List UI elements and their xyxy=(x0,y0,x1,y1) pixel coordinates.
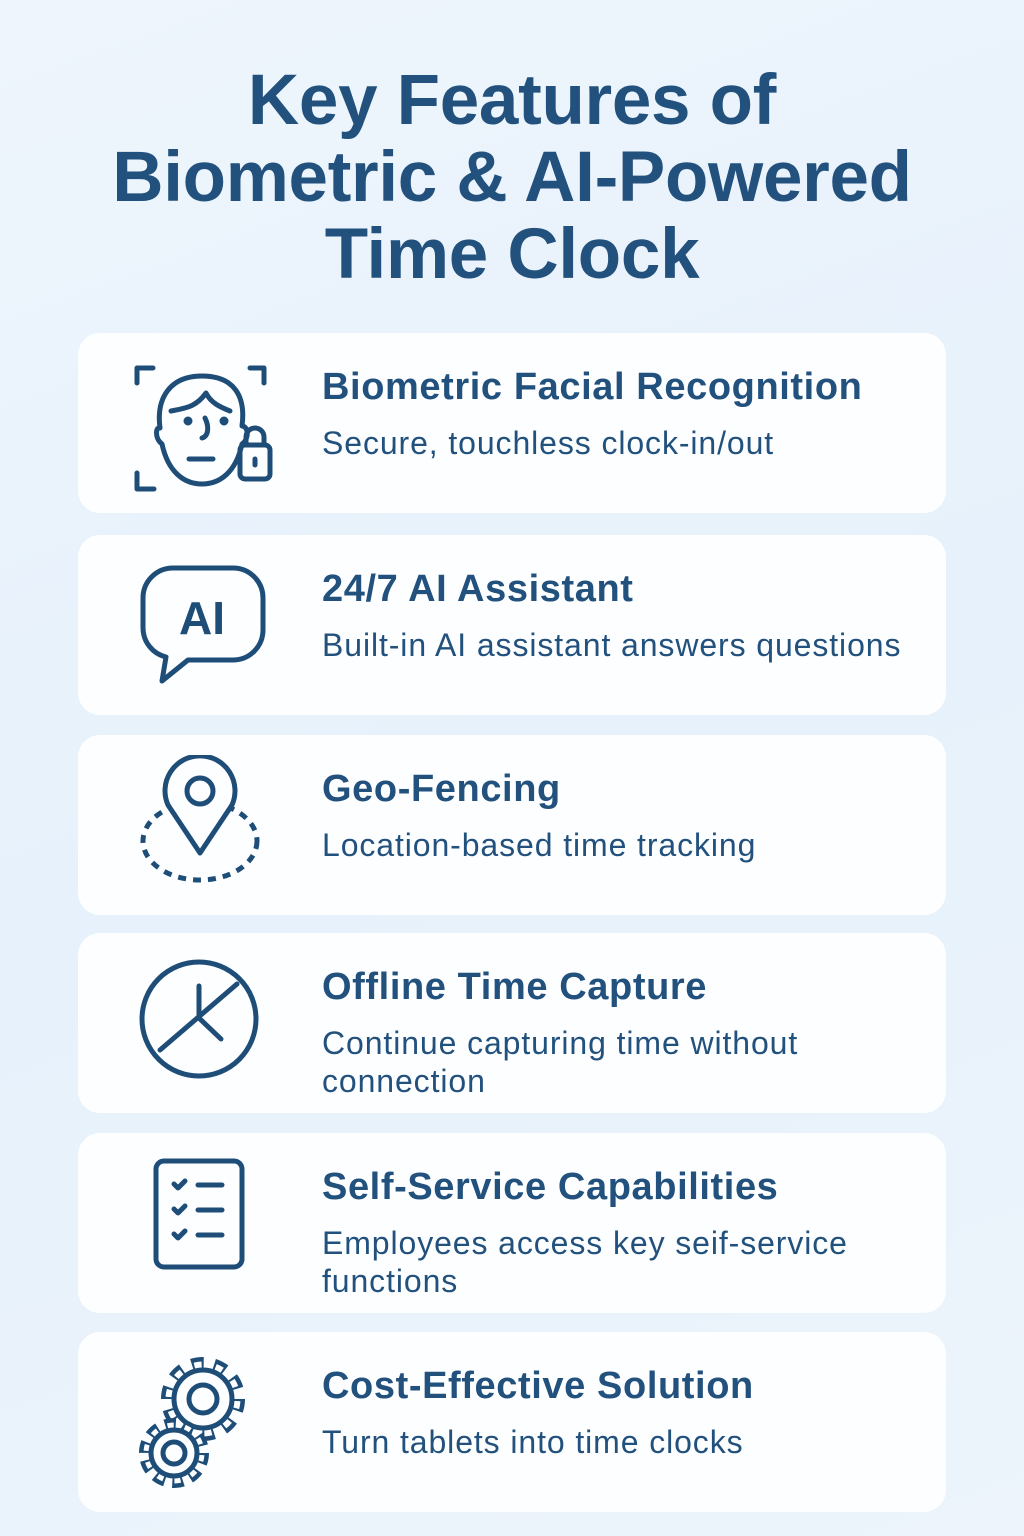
description: functions xyxy=(322,1263,458,1299)
description: connection xyxy=(322,1063,486,1099)
title: Time Clock xyxy=(325,215,699,294)
icon: gears xyxy=(139,1357,245,1488)
panel: geo-fencing xyxy=(78,735,946,915)
panel: cost-effective xyxy=(78,1332,946,1512)
panel: facial recognition xyxy=(78,333,946,513)
icon: AI speech bubble: AI xyxy=(179,592,225,644)
title xyxy=(112,61,912,294)
heading: Biometric Facial Recognition xyxy=(322,366,862,408)
panel: self-service xyxy=(78,1133,946,1313)
description: Turn tablets into time clocks xyxy=(322,1424,744,1460)
heading: Cost-Effective Solution xyxy=(322,1365,754,1407)
panel: AI assistant xyxy=(78,535,946,715)
title: Biometric & AI-Powered xyxy=(112,138,912,217)
description xyxy=(322,1225,848,1299)
description: Employees access key seif-service xyxy=(322,1225,848,1261)
icon: checklist xyxy=(154,1158,244,1270)
description: Location-based time tracking xyxy=(322,827,756,863)
heading: 24/7 AI Assistant xyxy=(322,568,634,610)
description: Built-in AI assistant answers questions xyxy=(322,627,901,663)
description: Secure, touchless clock-in/out xyxy=(322,425,774,461)
title: Key Features of xyxy=(248,61,776,140)
heading: Offline Time Capture xyxy=(322,966,707,1008)
heading: Geo-Fencing xyxy=(322,768,561,810)
icon: map pin with dashed ring xyxy=(140,755,260,882)
description: Continue capturing time without xyxy=(322,1025,798,1061)
description xyxy=(322,1025,798,1099)
icon: face scan with lock xyxy=(134,366,272,492)
heading: Self-Service Capabilities xyxy=(322,1166,778,1208)
icon: AI speech bubble xyxy=(140,566,266,684)
icon: clock crossed out xyxy=(140,960,258,1078)
panel: offline time capture xyxy=(78,933,946,1113)
